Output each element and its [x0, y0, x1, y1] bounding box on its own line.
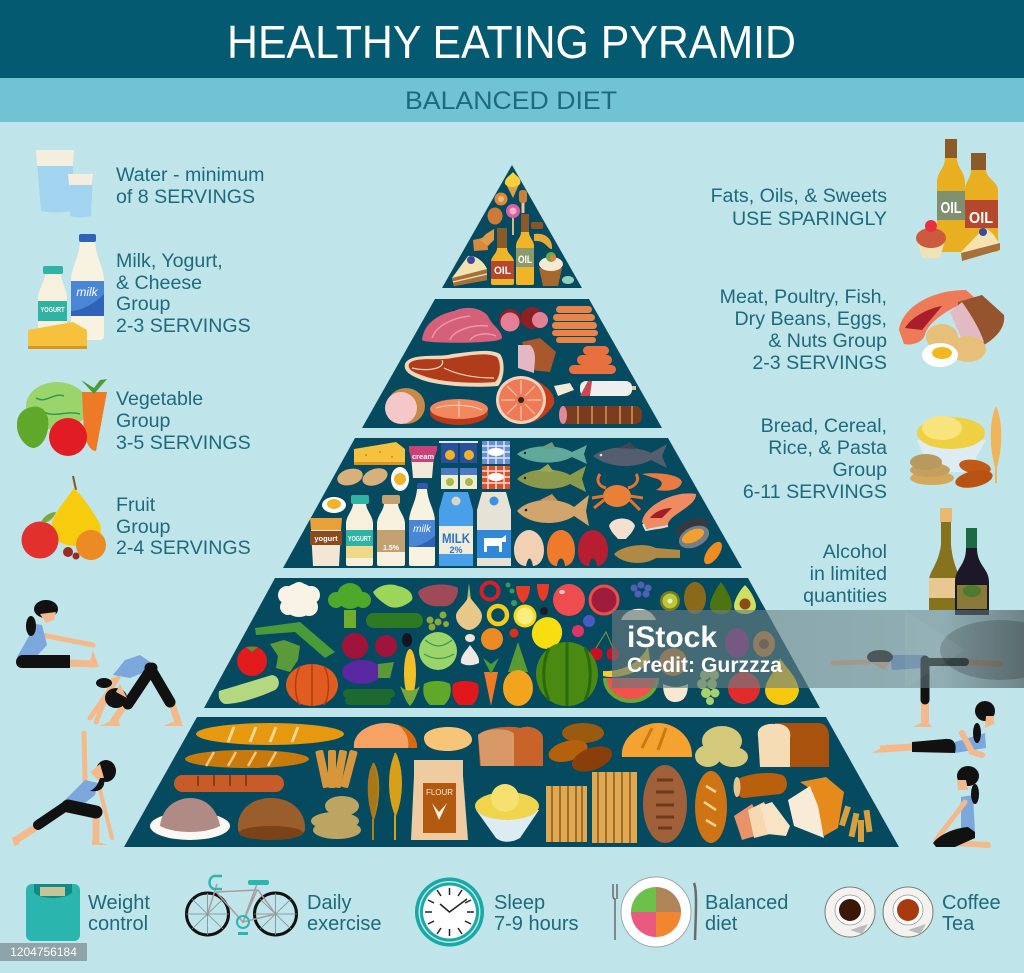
- bottom row: sleep: 7-9 hours: [494, 913, 578, 935]
- icon: water glasses: [36, 150, 93, 218]
- flour bag: [411, 760, 468, 840]
- yoga figure lunge: [12, 733, 116, 846]
- halved egg: [391, 467, 409, 491]
- bottom row: balanced diet: [613, 877, 788, 947]
- shrimp: [642, 473, 682, 491]
- icon: tea cup: [883, 887, 933, 937]
- milk carton blue: [439, 492, 473, 566]
- right column: fats and sweets: [711, 139, 1000, 261]
- left column: fruit: [22, 476, 251, 560]
- onion: [456, 583, 482, 630]
- ice cream cone: [505, 172, 520, 198]
- halved egg small: [322, 497, 346, 513]
- bottom row: daily exercise: Daily: [307, 892, 351, 914]
- small roll: [734, 773, 787, 798]
- right column: meat: & Nuts Group: [768, 330, 887, 352]
- left column: milk group: [28, 234, 251, 349]
- yellow pepper ring: [489, 606, 507, 624]
- ham chunk: [518, 338, 556, 373]
- blueberries: [630, 582, 652, 598]
- milk bottle: [409, 483, 435, 566]
- icon: bicycle: [186, 876, 297, 935]
- baguette top: [196, 723, 344, 745]
- long roll: [174, 775, 284, 792]
- toast loaf: [758, 723, 829, 767]
- cabbage: [419, 632, 457, 670]
- radicchio: [418, 585, 458, 606]
- sausage pile: [552, 306, 598, 343]
- icon: alcohol bottles: [929, 508, 989, 615]
- pyramid tier 5: grains: [124, 717, 899, 847]
- milk carton cow: [477, 492, 511, 566]
- fish steak red: [578, 530, 608, 566]
- pear: [765, 658, 799, 705]
- sliced loaf: [788, 777, 844, 838]
- scallions: [255, 622, 335, 658]
- cake slice: [452, 256, 487, 286]
- right column: fats and sweets: USE SPARINGLY: [732, 208, 887, 230]
- icon: salmon, ham and eggs: [899, 290, 1004, 367]
- plate with dough: [150, 798, 230, 840]
- tied roast: [559, 406, 642, 424]
- right column: bread: Bread, Cereal,: [761, 415, 887, 437]
- header banner: [0, 0, 1024, 78]
- milk carton blue: MILK: [442, 530, 470, 546]
- berries: [572, 615, 595, 637]
- yogurt bottle teal cap: YOGURT: [348, 536, 372, 543]
- watermelon slice: [603, 678, 659, 703]
- right column: meat: Dry Beans, Eggs,: [735, 308, 887, 330]
- flour bag: FLOUR: [426, 788, 453, 797]
- icon: oils and sweets: [916, 139, 1000, 261]
- croissant: [534, 234, 552, 249]
- tomato: [237, 646, 267, 676]
- loaf half: [354, 723, 417, 748]
- left column: milk group: Group: [116, 293, 171, 315]
- pyramid tier 2: meat: [362, 299, 662, 428]
- cream cup: cream: [412, 452, 434, 461]
- right column: meat: Meat, Poultry, Fish,: [720, 286, 887, 308]
- right column: meat: [720, 286, 1004, 374]
- milk bottle: milk: [413, 524, 432, 535]
- brown oval loaf: [643, 765, 687, 843]
- banana: [603, 646, 650, 677]
- right column: bread: [743, 406, 1001, 503]
- flat fish: [614, 545, 680, 563]
- icon: milk, yogurt and cheese: milk: [76, 285, 99, 299]
- eggplant: [342, 660, 394, 684]
- red pepper ring: [482, 582, 498, 600]
- cake roll: [488, 208, 502, 224]
- left column: milk group: Milk, Yogurt,: [116, 250, 223, 272]
- crackers: [473, 229, 494, 251]
- flat cookies: [311, 796, 361, 839]
- yoga figure seated forward bend: [16, 600, 99, 668]
- apple: [728, 672, 760, 704]
- sausages small: [569, 346, 616, 374]
- salami: [499, 307, 548, 332]
- corn: [400, 649, 420, 706]
- bottom row: coffee and tea: Coffee: [942, 892, 1001, 914]
- red pepper: [452, 681, 479, 705]
- pastry roll: [494, 192, 508, 206]
- peas: [506, 582, 517, 606]
- grapes: [697, 670, 720, 705]
- subtitle band: [0, 78, 1024, 122]
- left column: water: of 8 SERVINGS: [116, 186, 255, 208]
- fish tan: [517, 494, 589, 526]
- pyramid tier 1: fats, oils and sweets: [442, 165, 582, 288]
- olives: [426, 612, 449, 630]
- small tomato: [510, 628, 518, 638]
- bottom row: weight control: control: [88, 913, 148, 935]
- stock photo watermark: [612, 610, 1024, 688]
- oil bottle right: OIL: [518, 254, 532, 266]
- pyramid tier 3: dairy and fish: [283, 438, 742, 568]
- bottom row: daily exercise: [186, 876, 381, 935]
- mussel meat: [701, 539, 725, 567]
- left column: vegetables: [17, 379, 251, 456]
- avocado: [710, 582, 732, 614]
- spaghetti bundle: [546, 786, 587, 842]
- dark bread: [238, 798, 305, 840]
- lemon slice: [514, 604, 536, 628]
- zucchini: [219, 675, 279, 704]
- right column: alcohol: quantities: [803, 585, 887, 607]
- left column: fruit: Fruit: [116, 494, 156, 516]
- cream cup: [409, 446, 437, 478]
- cheese wedge: [354, 442, 405, 465]
- yoga figure cobra pose: [872, 701, 995, 755]
- left column: fruit: Group: [116, 516, 171, 538]
- pumpkin: [286, 664, 338, 706]
- stock photo watermark: iStock: [627, 621, 717, 654]
- bottom row: sleep: [415, 878, 578, 946]
- left column: water: Water - minimum: [116, 164, 264, 186]
- small pastry: [519, 190, 527, 213]
- milk carton blue: 2%: [449, 545, 463, 555]
- pomegranate: [553, 584, 585, 616]
- icon: oils and sweets: OIL: [940, 200, 962, 217]
- cherries: [590, 632, 620, 660]
- yogurt cup: [310, 518, 342, 566]
- bottom row: coffee and tea: [825, 887, 1001, 937]
- right column: alcohol: Alcohol: [823, 541, 887, 563]
- stock photo watermark: Credit: Gurzzza: [627, 654, 782, 677]
- butter red: [482, 466, 510, 489]
- steak: [405, 351, 504, 387]
- yogurt cup: yogurt: [314, 534, 338, 543]
- pink meat cuts: [422, 308, 502, 343]
- bottom row: daily exercise: exercise: [307, 913, 381, 935]
- left column: milk group: & Cheese: [116, 272, 202, 294]
- fish steak cream: [514, 530, 544, 566]
- mussel: [673, 514, 713, 553]
- plum: [725, 628, 749, 658]
- pork chunk: [385, 388, 425, 424]
- cookie: [531, 222, 543, 229]
- cupcake: [539, 252, 563, 286]
- left column: vegetables: 3-5 SERVINGS: [116, 432, 251, 454]
- kiwi slice: [660, 591, 680, 611]
- green pepper: [423, 681, 451, 705]
- right column: fats and sweets: Fats, Oils, & Sweets: [711, 185, 887, 207]
- meat slice: [430, 399, 488, 425]
- icon: oils and sweets: OIL: [969, 210, 993, 227]
- fish dark grey: [593, 442, 667, 468]
- image id tag: [0, 943, 87, 961]
- red onions: [342, 633, 397, 659]
- fish steak orange: [547, 530, 575, 566]
- wholemeal loaf: [478, 727, 543, 766]
- left column: fruit: 2-4 SERVINGS: [116, 537, 251, 559]
- fusilli: [315, 750, 358, 788]
- icon: vegetables: [17, 379, 107, 456]
- icon: scale: [26, 884, 80, 941]
- left column: milk group: 2-3 SERVINGS: [116, 315, 251, 337]
- pineapple: [503, 642, 533, 706]
- icon: coffee cup: [825, 887, 875, 937]
- right column: alcohol: in limited: [810, 563, 887, 585]
- garlic: [461, 645, 479, 665]
- butter blue: [482, 441, 510, 464]
- avocado half: [734, 585, 756, 614]
- bottom row: weight control: Weight: [88, 892, 150, 914]
- apple slice: [663, 684, 688, 702]
- right column: bread: Rice, & Pasta: [768, 437, 887, 459]
- right column: bread: Group: [833, 459, 887, 481]
- bread roll: [424, 727, 472, 751]
- cucumber: [366, 613, 423, 628]
- cauliflower: [278, 582, 320, 617]
- baguette middle: [185, 750, 309, 768]
- pyramid tier 4: vegetables and fruit: [204, 578, 820, 708]
- ham leg: [496, 376, 574, 424]
- yogurt cups light: [441, 468, 477, 489]
- pale loaf: [622, 723, 692, 757]
- left column: water: [36, 150, 264, 218]
- parsley: [270, 640, 300, 672]
- macaron: [562, 276, 574, 284]
- image id tag: 1204756184: [10, 945, 77, 959]
- bread slices: [734, 802, 790, 840]
- crab: [592, 474, 643, 510]
- bottom row: balanced diet: diet: [705, 913, 738, 935]
- right column: alcohol: [803, 508, 989, 615]
- wheat ears: [368, 753, 401, 840]
- bowl of mash: [475, 784, 539, 842]
- black berry: [540, 607, 548, 615]
- bottom row: balanced diet: Balanced: [705, 892, 788, 914]
- subtitle band: BALANCED DIET: [405, 87, 617, 115]
- bottom row: weight control: [26, 884, 150, 941]
- broccoli: [328, 583, 371, 628]
- lemon: [527, 613, 567, 653]
- dark rolls: [546, 723, 615, 777]
- orange: [481, 628, 503, 650]
- black olive: [402, 633, 412, 647]
- yoga figure standing balance: [833, 650, 1000, 727]
- yogurt cups dark: [439, 441, 478, 463]
- fish olive: [517, 464, 586, 492]
- garlic clove: [465, 634, 475, 642]
- bottle tan cap: [377, 495, 405, 566]
- scallop: [609, 518, 635, 539]
- icon: milk, yogurt and cheese: [28, 234, 104, 349]
- mushroom: [621, 609, 656, 620]
- white sausage: [580, 381, 636, 396]
- yogurt bottle teal cap: [346, 495, 373, 566]
- right column: meat: 2-3 SERVINGS: [752, 352, 887, 374]
- icon: clock: [415, 878, 484, 946]
- spaghetti tall: [592, 772, 637, 843]
- peach half: [753, 631, 775, 657]
- fusilli small: [839, 806, 873, 842]
- lollipop: [506, 204, 520, 235]
- icon: milk, yogurt and cheese: YOGURT: [40, 305, 65, 314]
- icon: grains: [910, 406, 1001, 491]
- icon: plate with fork and knife: [613, 877, 696, 947]
- potatoes: [695, 726, 748, 767]
- oil bottle left: OIL: [494, 265, 511, 277]
- yoga figure downward bend: [90, 655, 184, 726]
- carrot: [483, 658, 499, 706]
- fish teal: [517, 442, 587, 464]
- lettuce: [373, 584, 412, 608]
- bottle tan cap: 1.5%: [383, 545, 400, 552]
- yoga figure kneeling: [933, 766, 988, 847]
- strawberries: [516, 584, 549, 603]
- right column: bread: 6-11 SERVINGS: [743, 481, 887, 503]
- vertical baguette: [695, 771, 727, 843]
- cucumbers: [343, 689, 395, 705]
- brown eggs: [335, 465, 390, 489]
- left column: vegetables: Group: [116, 410, 171, 432]
- salmon steak: [642, 493, 696, 530]
- icon: fruit: [22, 476, 106, 560]
- kiwi behind watermark: [659, 648, 687, 676]
- left column: vegetables: Vegetable: [116, 388, 203, 410]
- pomegranate half: [588, 584, 620, 616]
- kiwi whole: [684, 582, 706, 614]
- title: HEALTHY EATING PYRAMID: [227, 16, 796, 68]
- bottom row: coffee and tea: Tea: [942, 913, 975, 935]
- bottom row: sleep: Sleep: [494, 892, 545, 914]
- watermelon: [536, 642, 598, 706]
